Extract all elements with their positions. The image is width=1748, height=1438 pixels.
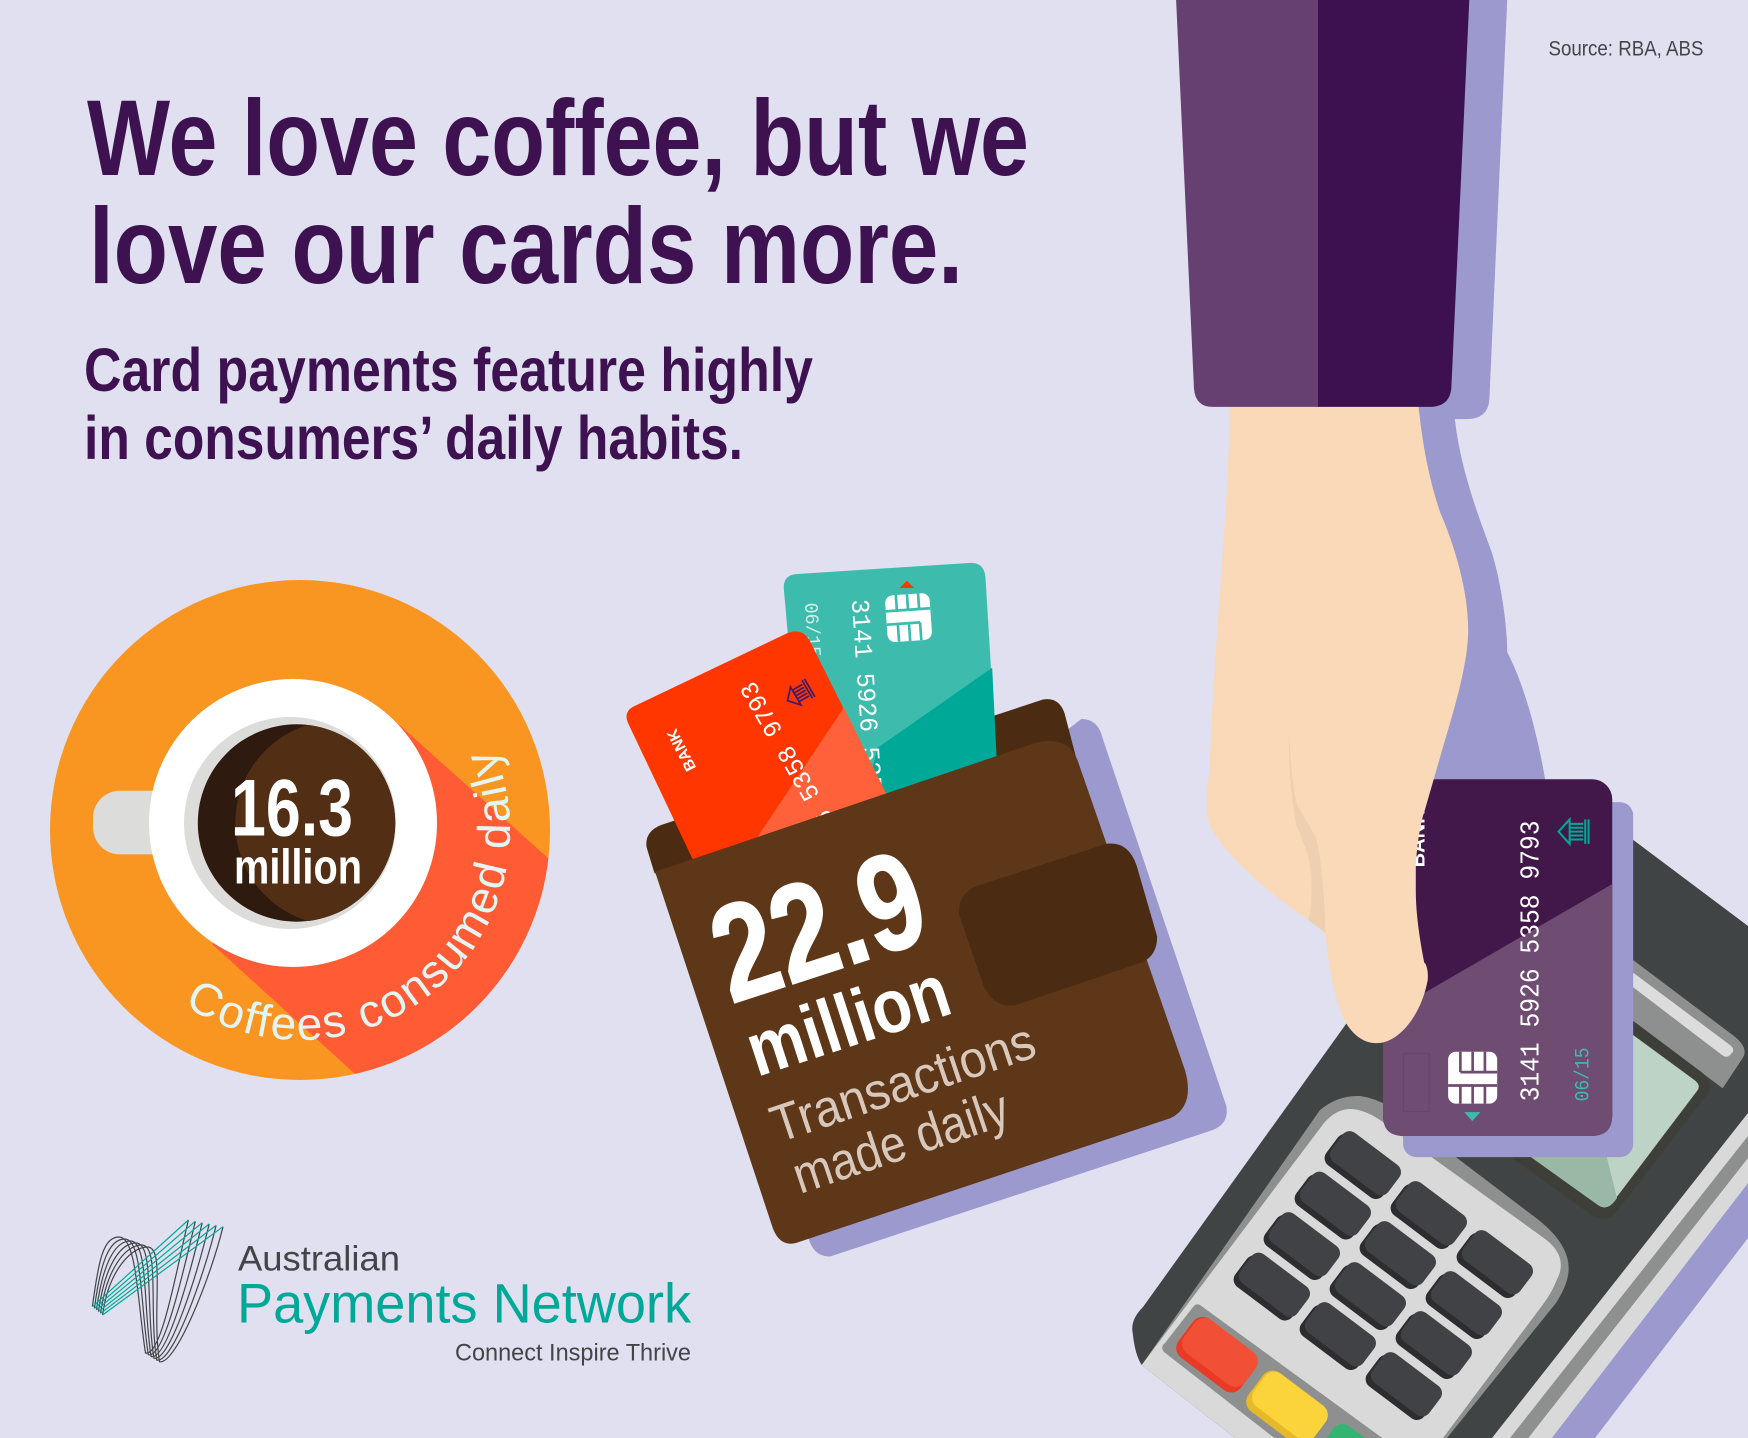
wallet back flap xyxy=(646,699,1079,881)
cup shadow xyxy=(212,724,548,1074)
wallet shadow xyxy=(713,719,1227,1256)
transactions caption: Transactions xyxy=(763,1012,1043,1154)
cup inner rim xyxy=(184,717,396,929)
source note: Source: RBA, ABS xyxy=(1548,38,1704,61)
coffee surface xyxy=(198,724,395,922)
teal card xyxy=(784,563,998,881)
coffee unit: million xyxy=(234,841,362,895)
red card: 3141 5926 5358 9793 xyxy=(735,676,901,934)
curved coffee caption: Coffees consumed daily xyxy=(190,756,510,1040)
terminal body xyxy=(1132,785,1748,1438)
red card: BANK xyxy=(664,725,700,774)
teal card: 06/15 xyxy=(799,602,825,658)
red button xyxy=(1171,1312,1263,1397)
purple credit card: 3141 5926 5358 9793 xyxy=(1517,820,1547,1101)
purple credit card: BANK xyxy=(1408,809,1430,867)
transactions number: 22.9 xyxy=(693,821,944,1033)
card slot xyxy=(1600,935,1745,1088)
purple credit card xyxy=(1383,779,1612,1136)
hand xyxy=(1207,401,1468,1043)
title xyxy=(87,77,1029,306)
green button xyxy=(1311,1419,1403,1438)
terminal screen xyxy=(1480,996,1710,1219)
coffee number: 16.3 xyxy=(231,764,353,854)
subtitle xyxy=(84,336,813,472)
transactions unit: million xyxy=(736,948,960,1093)
payment terminal xyxy=(1132,785,1748,1438)
title: We love coffee, but we xyxy=(87,77,1029,198)
sleeve dark panel xyxy=(1318,0,1469,407)
hand and sleeve illustration xyxy=(1176,0,1633,1157)
logo mark xyxy=(92,1220,223,1362)
transactions caption line two: made daily xyxy=(785,1079,1016,1205)
yellow button xyxy=(1241,1366,1333,1438)
wallet body xyxy=(655,741,1188,1244)
wallet illustration xyxy=(627,563,1227,1256)
card shadow xyxy=(1403,802,1633,1157)
logo tagline: Connect Inspire Thrive xyxy=(455,1340,691,1367)
subtitle: Card payments feature highly xyxy=(84,336,813,404)
keypad face xyxy=(1142,1109,1561,1438)
logo word: Australian: Australian xyxy=(238,1240,400,1279)
hand shadow xyxy=(1410,390,1546,786)
purple credit card: 06/15 xyxy=(1573,1047,1596,1101)
keypad keys xyxy=(1230,1126,1537,1425)
coffee highlight xyxy=(235,725,396,921)
logo xyxy=(92,1220,692,1367)
red card xyxy=(627,631,903,934)
terminal shadow xyxy=(1552,1183,1748,1438)
subtitle: in consumers’ daily habits. xyxy=(84,404,743,472)
wallet stats text xyxy=(693,821,1043,1205)
title: love our cards more. xyxy=(89,185,963,306)
teal card: 3141 5926 5358 9793 xyxy=(844,598,892,881)
terminal side stripes xyxy=(1492,1113,1748,1438)
sleeve shadow xyxy=(1438,0,1507,419)
cup xyxy=(149,679,437,967)
hand crease xyxy=(1289,730,1325,933)
cup handle xyxy=(93,791,183,854)
wallet strap xyxy=(959,844,1157,1006)
logo word: Payments Network: Payments Network xyxy=(237,1271,692,1334)
sleeve light panel xyxy=(1176,0,1318,407)
keypad surround xyxy=(1142,1096,1569,1438)
function button tray xyxy=(1162,1304,1385,1438)
coffee cup panel xyxy=(50,580,550,1080)
saucer xyxy=(50,580,550,1080)
